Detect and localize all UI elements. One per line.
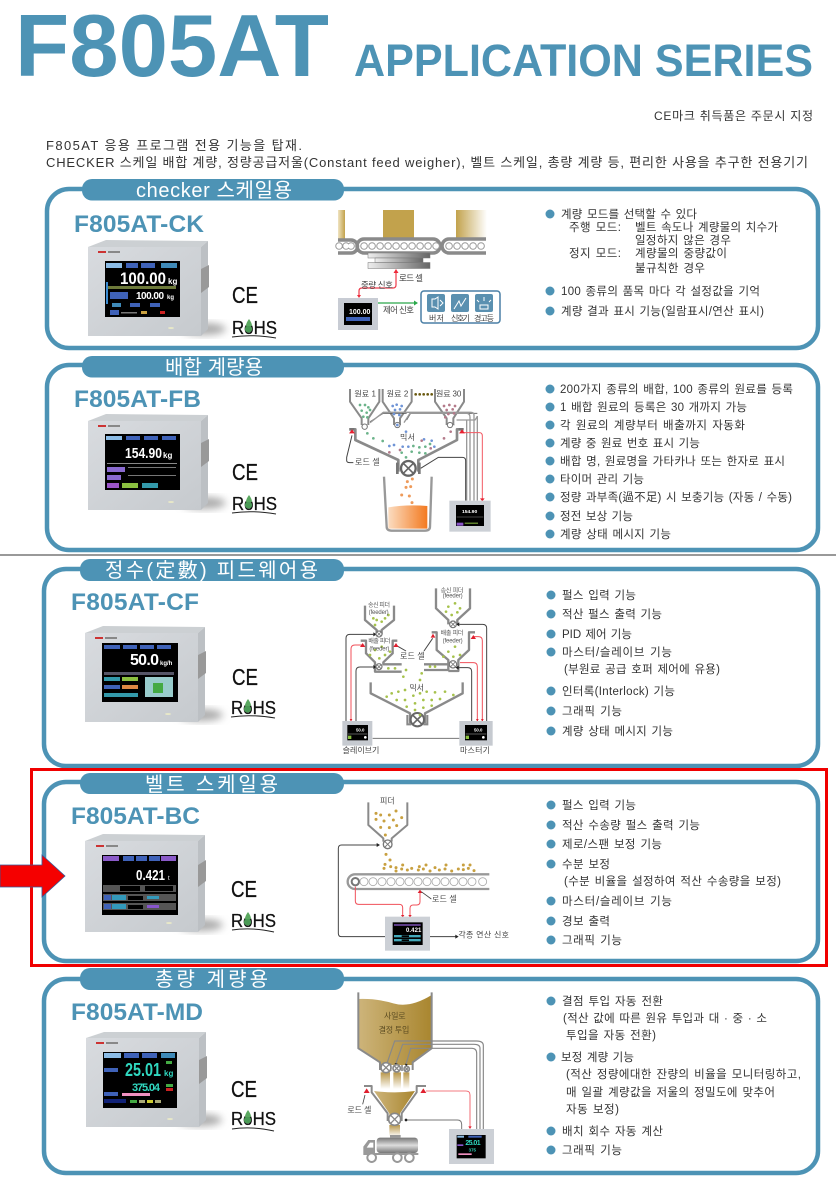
diagram: feeders, mixer and controllers: 슬레이브기 (343, 745, 379, 755)
feature list: BC: 펄스 입력 기능 (562, 798, 636, 812)
diagram: feeder and belt: 로드 셀 (432, 893, 457, 903)
feature list: CK: 벨트 속도나 계량물의 치수가 (635, 221, 778, 234)
diagram: checker conveyor: 신호기 (451, 314, 470, 323)
feature list: CF: 적산 펄스 출력 기능 (562, 607, 662, 621)
feature list: BC: 경보 출력 (562, 914, 610, 928)
diagram: blending hoppers and mixer: 원료 1 (354, 389, 377, 398)
device photo: MD: kg (164, 1069, 173, 1078)
diagram: feeders, mixer and controllers: 50.0 (474, 728, 483, 733)
diagram: feeders, mixer and controllers: 배출 피더 (441, 629, 463, 637)
feature list: BC: 마스터/슬레이브 기능 (562, 895, 672, 908)
intro text (46, 138, 808, 170)
diagram: feeders, mixer and controllers: 믹서 (409, 683, 424, 693)
device photo: CF (85, 626, 223, 722)
feature list: CF: 계량 상태 메시지 기능 (562, 725, 673, 738)
diagram: feeder and belt: 각종 연산 신호 (458, 930, 509, 940)
panel: checker scale (47, 179, 818, 348)
feature list: MD: 그래픽 기능 (562, 1144, 622, 1157)
feature list: MD: 보정 계량 기능 (561, 1051, 634, 1064)
diagram: feeders, mixer and controllers: 배출 피더 (368, 637, 390, 645)
feature list: CK: 계량 모드를 선택할 수 있다 (561, 208, 697, 221)
icon: RoHS mark: RoHS (231, 1109, 276, 1129)
feature list: BC: 그래픽 기능 (562, 934, 622, 947)
feature list: CK: 계량물의 중량값이 (635, 247, 727, 260)
model name: CF: F805AT-CF (71, 589, 199, 616)
device photo: CK: kg (168, 277, 177, 286)
device photo: CF: 50.0 (130, 652, 159, 669)
feature list: FB: 계량 중 원료 번호 표시 기능 (560, 436, 700, 450)
heading: checker (82, 179, 344, 202)
diagram: blending hoppers and mixer: 믹서 (400, 432, 415, 442)
device photo: CK: kg (167, 295, 174, 301)
device photo: FB: kg (163, 451, 172, 460)
device photo: BC: 0.421 (136, 867, 165, 884)
feature list: CF: (부원료 공급 호퍼 제어에 유용) (564, 662, 720, 676)
feature list: MD: (적산 정량에대한 잔량의 비율을 모니터링하고, (566, 1067, 801, 1081)
feature list: MD: (적산 값에 따른 원유 투입과 대 · 중 · 소 (563, 1011, 767, 1025)
icon: RoHS mark: RoHS (232, 494, 277, 514)
diagram: feeders, mixer and controllers (342, 586, 493, 755)
feature list: CK: 불규칙한 경우 (635, 261, 705, 275)
icon: RoHS mark: RoHS (232, 318, 277, 338)
model name: CK: F805AT-CK (74, 211, 204, 238)
subtitle: APPLICATION SERIES: APPLICATION SERIES (354, 35, 813, 86)
diagram: feeders, mixer and controllers: 송신 피더 (368, 601, 390, 609)
panel: blending weighing (47, 356, 818, 550)
diagram: feeders, mixer and controllers: (feeder) (369, 646, 389, 652)
diagram: feeders, mixer and controllers: 로드 셀 (400, 650, 425, 660)
feature list: FB: 계량 상태 메시지 기능 (560, 528, 671, 541)
device photo: BC: t (168, 876, 170, 882)
diagram: feeders, mixer and controllers: (feeder) (443, 594, 463, 600)
diagram: silo, hopper and truck: 사일로 (384, 1011, 406, 1020)
intro text: F805AT 응용 프로그램 전용 기능을 탑재. (46, 138, 302, 153)
device photo: FB (88, 414, 226, 510)
feature list: CF: PID 제어 기능 (562, 628, 632, 641)
feature list: BC: 적산 수송량 펄스 출력 기능 (562, 818, 700, 832)
diagram: checker conveyor: 로드 셀 (399, 273, 423, 283)
feature list: BC: 제로/스팬 보정 기능 (562, 838, 662, 851)
feature list: FB: 1 배합 원료의 등록은 30 개까지 가능 (560, 400, 747, 414)
feature list: CF: 펄스 입력 기능 (562, 588, 636, 602)
diagram: blending hoppers and mixer: 154.90 (462, 509, 477, 515)
intro text: CHECKER 스케일 배합 계량, 정량공급저울(Constant feed weigher), 벨트 스케일, 총량 계량 등, 편리한 사용을 추구한 전용기기 (46, 155, 808, 170)
feature list: CK: 정지 모드: (569, 247, 621, 260)
diagram: checker conveyor: 중량 신호 (361, 280, 393, 290)
feature list: FB: 배합 명, 원료명을 가타카나 또는 한자로 표시 (560, 454, 785, 468)
icon: RoHS mark: RoHS (231, 698, 276, 718)
feature list: MD: 결점 투입 자동 전환 (562, 995, 663, 1008)
device photo: CK: 100.00 (120, 269, 166, 288)
diagram: checker conveyor: 버저 (429, 313, 444, 323)
diagram: feeders, mixer and controllers: (feeder) (443, 638, 463, 644)
feature list: CK: 일정하지 않은 경우 (635, 233, 731, 247)
panel: belt scale highlight (32, 770, 826, 966)
heading: belt scale: 벨트 스케일용 (145, 773, 278, 796)
panel: constant feed weigher (44, 559, 818, 766)
diagram: feeder and belt: 피더 (380, 796, 395, 805)
note: CE mark: CE마크 취득품은 주문시 지정 (654, 109, 813, 123)
icon: CE mark: CE (232, 459, 258, 485)
feature list: FB: 정전 보상 기능 (560, 510, 633, 523)
feature list: MD: 배치 회수 자동 계산 (562, 1125, 663, 1138)
device photo: MD: 25.01 (125, 1060, 161, 1080)
diagram: checker conveyor: 경고등 (474, 313, 494, 323)
feature list: CK: 주행 모드: (569, 221, 621, 234)
heading: belt scale (80, 773, 344, 796)
feature list: CF: 마스터/슬레이브 기능 (562, 646, 672, 659)
diagram: checker conveyor (338, 210, 500, 330)
heading: checker: checker 스케일용 (136, 179, 292, 202)
heading: blending: 배합 계량용 (165, 356, 263, 379)
heading: total weighing (80, 968, 344, 991)
device photo: BC (85, 834, 223, 932)
feature list: MD: 자동 보정) (566, 1103, 619, 1116)
icon: CE mark: CE (231, 876, 257, 902)
feature list: CF (546, 588, 720, 738)
diagram: feeders, mixer and controllers: 50.0 (356, 728, 365, 733)
panel: total weighing (44, 968, 818, 1173)
diagram: silo, hopper and truck (347, 992, 494, 1164)
icon: CE mark: CE (231, 1076, 257, 1102)
diagram: feeder and belt (338, 796, 509, 951)
diagram: feeders, mixer and controllers: (feeder) (369, 610, 389, 616)
divider line (0, 554, 836, 556)
diagram: checker conveyor: 제어 신호 (383, 305, 414, 315)
heading: blending (82, 356, 344, 379)
feature list: MD: 매 일괄 계량값을 저울의 정밀도에 맞추어 (566, 1085, 775, 1099)
icon: CE mark: CE (232, 282, 258, 308)
arrow: red pointer (0, 855, 65, 897)
feature list: FB: 정량 과부족(過不足) 시 보충기능 (자동 / 수동) (560, 491, 792, 504)
model name: FB: F805AT-FB (74, 386, 201, 413)
device photo: CK (88, 240, 226, 336)
diagram: silo, hopper and truck: 로드 셀 (347, 1104, 371, 1114)
icon: CE mark: CE (232, 664, 258, 690)
feature list: FB (546, 382, 793, 541)
diagram: silo, hopper and truck: 25.01 (465, 1140, 481, 1147)
device photo: CK: 100.00 (136, 291, 164, 302)
diagram: blending hoppers and mixer: 원료 30 (436, 389, 462, 398)
heading: total weighing: 총량 계량용 (155, 968, 268, 991)
feature list: MD: 투입을 자동 전환) (566, 1029, 656, 1042)
device photo: CF: kg/h (160, 661, 173, 667)
feature list: CK (546, 208, 778, 318)
feature list: CK: 계량 결과 표시 기능(일람표시/연산 표시) (561, 304, 764, 318)
feature list: FB: 타이머 관리 기능 (560, 473, 644, 486)
feature list: BC: (수분 비율을 설정하여 적산 수송량을 보정) (564, 874, 781, 888)
icon: RoHS mark: RoHS (231, 911, 276, 931)
feature list: FB: 각 원료의 계량부터 배출까지 자동화 (560, 418, 745, 432)
feature list: BC: 수분 보정 (562, 858, 610, 871)
diagram: silo, hopper and truck: 375 (469, 1148, 476, 1153)
diagram: checker conveyor: 100.00 (349, 309, 371, 316)
diagram: blending hoppers and mixer: 로드 셀 (355, 457, 380, 467)
model name: MD: F805AT-MD (71, 999, 203, 1026)
device photo: MD (86, 1032, 222, 1127)
feature list: CK: 100 종류의 품목 마다 각 설정값을 기억 (561, 285, 760, 298)
diagram: feeders, mixer and controllers: 마스터기 (460, 746, 490, 755)
diagram: blending hoppers and mixer: 원료 2 (387, 389, 409, 398)
diagram: feeders, mixer and controllers: 송신 피더 (441, 586, 463, 594)
feature list: CF: 그래픽 기능 (562, 705, 622, 718)
feature list: MD (546, 995, 801, 1157)
heading: constant feed: 정수(定數) 피드웨어용 (105, 559, 318, 582)
model name: BC: F805AT-BC (71, 803, 200, 830)
feature list: FB: 200가지 종류의 배합, 100 종류의 원료를 등록 (560, 382, 793, 396)
diagram: blending hoppers and mixer (347, 389, 491, 532)
device photo: FB: 154.90 (125, 445, 162, 462)
diagram: silo, hopper and truck: 결정 투입 (379, 1024, 409, 1034)
feature list: CF: 인터록(Interlock) 기능 (562, 685, 675, 698)
feature list: BC (546, 798, 781, 947)
device photo: MD: 375.04 (132, 1082, 161, 1094)
diagram: feeder and belt: 0.421 (406, 928, 422, 934)
